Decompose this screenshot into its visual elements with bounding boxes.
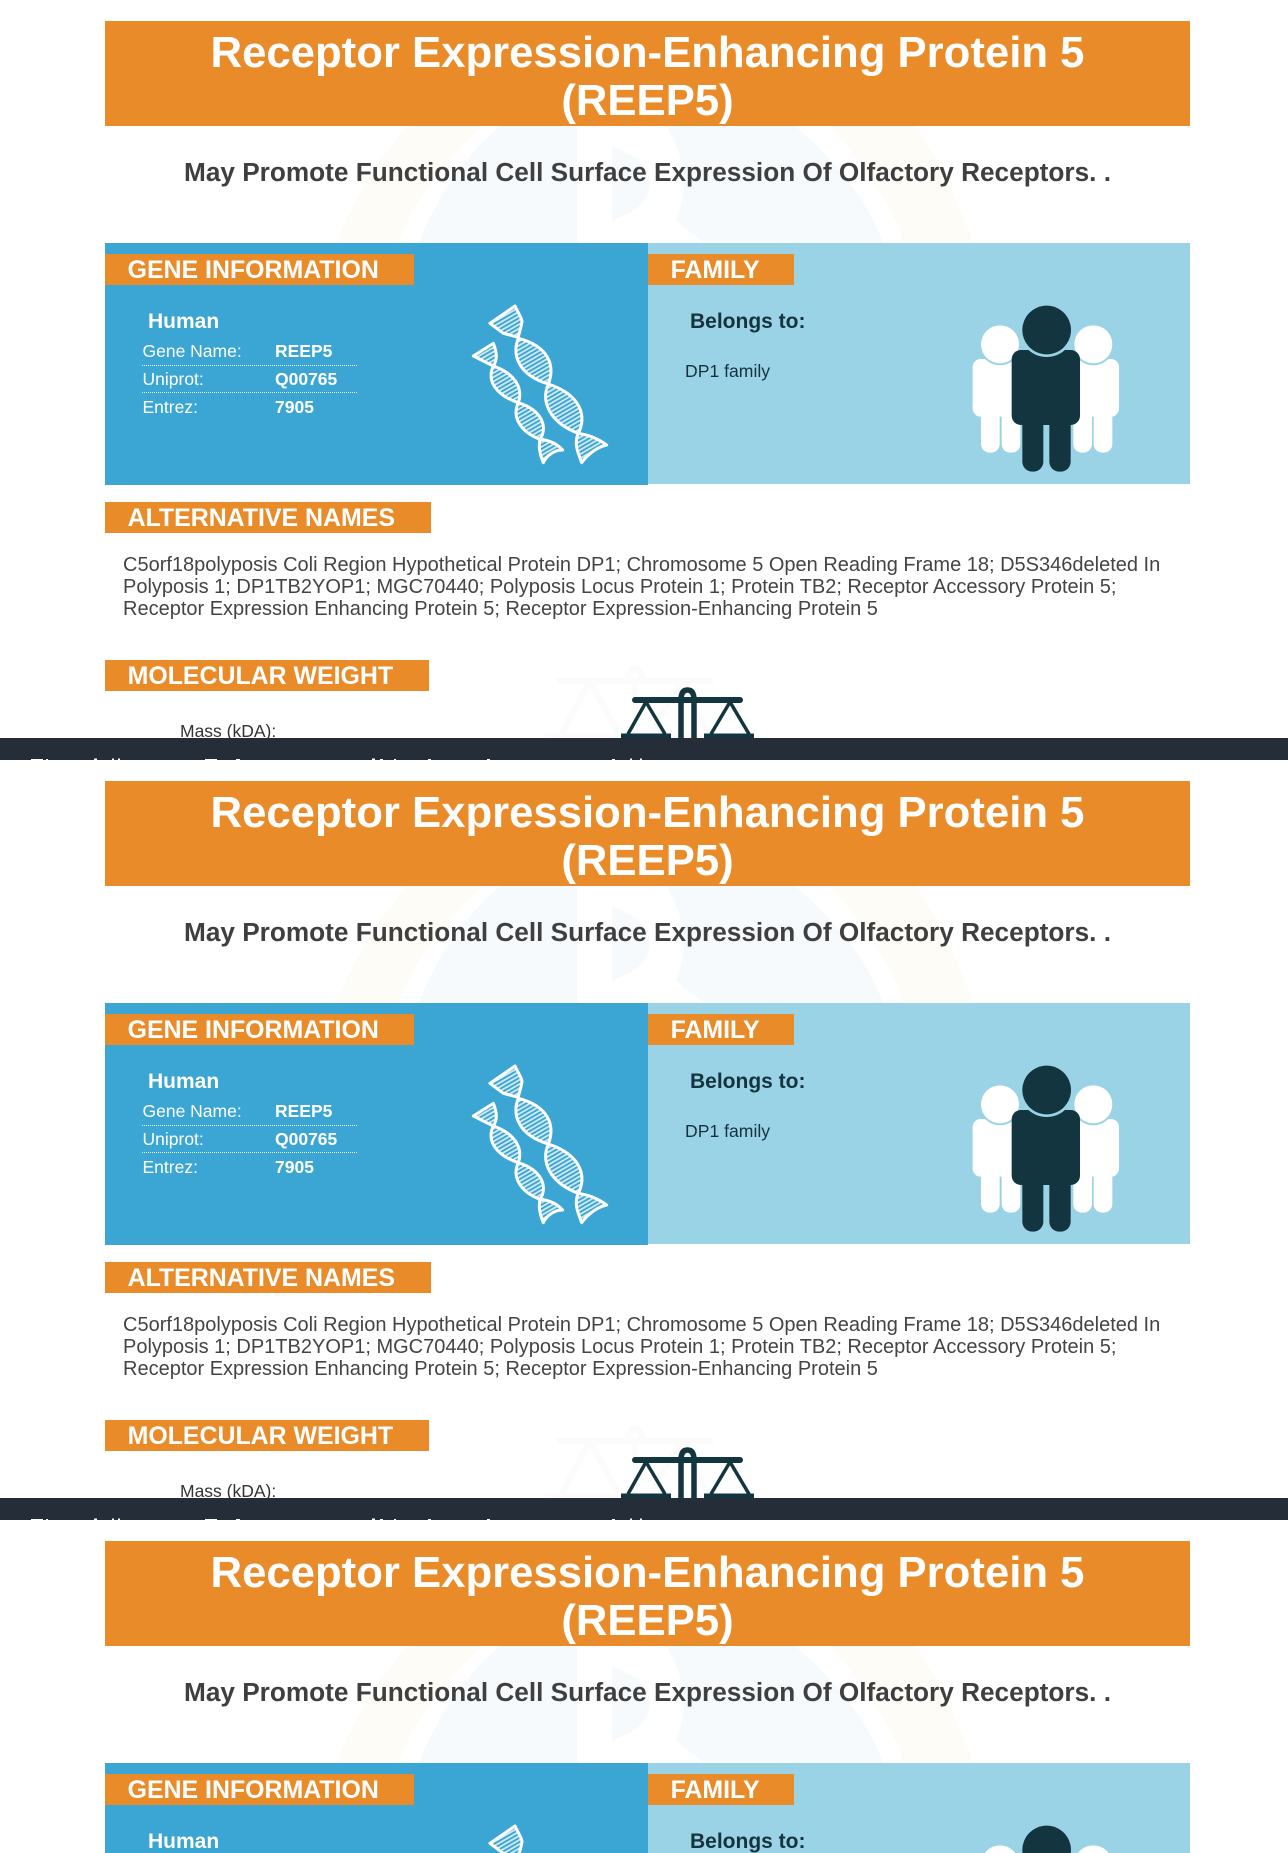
panel: family (648, 1003, 1190, 1244)
page tile 3 (cut off) (0, 1520, 1288, 1853)
title banner: (REEP5) (561, 76, 734, 125)
panel: family (648, 1763, 1190, 1853)
heading: alternative names: ALTERNATIVE NAMES (128, 504, 395, 532)
text: human: Human (148, 1070, 219, 1093)
icon: dna helix (488, 1824, 524, 1853)
heading: family: FAMILY (671, 1776, 760, 1804)
background watermark (338, 126, 972, 243)
title banner: Receptor Expression-Enhancing Protein 5 (211, 788, 1084, 837)
icon: faint scale (540, 1420, 730, 1498)
text: alternative names: Polyposis 1; DP1TB2YOP1; MGC70440; Polyposis Locus Protein 1; Protein TB2; Receptor Accessory Protein 5; (123, 1336, 1116, 1358)
heading: molecular weight: MOLECULAR WEIGHT (128, 662, 393, 690)
title banner: (REEP5) (561, 836, 734, 885)
title banner (105, 781, 1190, 886)
footer band (0, 738, 1288, 760)
text: mass: Mass (kDA): (180, 1481, 276, 1501)
text: belongs to: Belongs to: (690, 1070, 806, 1093)
text: alternative names (123, 554, 1160, 620)
page tile 1 (0, 0, 1288, 760)
text: alternative names: Receptor Expression Enhancing Protein 5; Receptor Expression-Enhancing Protein 5 (123, 598, 878, 620)
heading: molecular weight: MOLECULAR WEIGHT (128, 1422, 393, 1450)
heading: family: FAMILY (671, 256, 760, 284)
icon: scale (621, 687, 754, 738)
text: belongs to: Belongs to: (690, 310, 806, 333)
uniprot value: Q00765 (275, 369, 337, 389)
text: alternative names: C5orf18polyposis Coli Region Hypothetical Protein DP1; Chromosome 5 Open Reading Frame 18; D5S346deleted In (123, 554, 1160, 576)
gene name value: REEP5 (275, 341, 332, 361)
heading: alternative names: ALTERNATIVE NAMES (128, 1264, 395, 1292)
entrez value: 7905 (275, 1157, 314, 1177)
icon: dna helix (472, 304, 608, 464)
heading: family (648, 254, 794, 285)
icon: scale (621, 1447, 754, 1498)
icon: dna helix (472, 1064, 608, 1224)
entrez value: 7905 (275, 397, 314, 417)
page tile 2 (0, 760, 1288, 1520)
heading: gene information: GENE INFORMATION (128, 1776, 379, 1804)
heading: family (648, 1014, 794, 1045)
text: alternative names: Polyposis 1; DP1TB2YOP1; MGC70440; Polyposis Locus Protein 1; Protein TB2; Receptor Accessory Protein 5; (123, 576, 1116, 598)
text: family name: DP1 family (685, 361, 770, 381)
subtitle: May Promote Functional Cell Surface Expression Of Olfactory Receptors. . (184, 157, 1111, 187)
icon: people (984, 1826, 1108, 1853)
uniprot value: Q00765 (275, 1129, 337, 1149)
text: belongs to: Belongs to: (690, 1830, 806, 1853)
title banner (105, 1541, 1190, 1646)
heading: family: FAMILY (671, 1016, 760, 1044)
text: alternative names: Receptor Expression Enhancing Protein 5; Receptor Expression-Enhancing Protein 5 (123, 1358, 878, 1380)
uniprot label: Uniprot: (142, 1129, 204, 1149)
footer band (0, 1498, 1288, 1520)
heading: gene information: GENE INFORMATION (128, 256, 379, 284)
background watermark (338, 1646, 972, 1763)
text: human: Human (148, 310, 219, 333)
panel: gene information (105, 1003, 648, 1245)
text: alternative names: C5orf18polyposis Coli Region Hypothetical Protein DP1; Chromosome 5 Open Reading Frame 18; D5S346deleted In (123, 1314, 1160, 1336)
title banner (105, 21, 1190, 126)
entrez label: Entrez: (142, 397, 198, 417)
panel: gene information (105, 1763, 648, 1853)
text: human: Human (148, 1830, 219, 1853)
panel: gene information (105, 243, 648, 485)
title banner: Receptor Expression-Enhancing Protein 5 (211, 1548, 1084, 1597)
heading: gene information: GENE INFORMATION (128, 1016, 379, 1044)
icon: faint scale (540, 660, 730, 738)
icon: people (972, 1066, 1119, 1232)
subtitle: May Promote Functional Cell Surface Expression Of Olfactory Receptors. . (184, 1677, 1111, 1707)
icon: people (972, 306, 1119, 472)
title banner: (REEP5) (561, 1596, 734, 1645)
text: mass: Mass (kDA): (180, 721, 276, 741)
background watermark (338, 886, 972, 1003)
text: alternative names (123, 1314, 1160, 1380)
title banner: Receptor Expression-Enhancing Protein 5 (211, 28, 1084, 77)
panel: family (648, 243, 1190, 484)
gene name value: REEP5 (275, 1101, 332, 1121)
entrez label: Entrez: (142, 1157, 198, 1177)
uniprot label: Uniprot: (142, 369, 204, 389)
text: family name: DP1 family (685, 1121, 770, 1141)
gene name label: Gene Name: (142, 1101, 242, 1121)
subtitle: May Promote Functional Cell Surface Expression Of Olfactory Receptors. . (184, 917, 1111, 947)
heading: family (648, 1774, 794, 1805)
gene name label: Gene Name: (142, 341, 242, 361)
